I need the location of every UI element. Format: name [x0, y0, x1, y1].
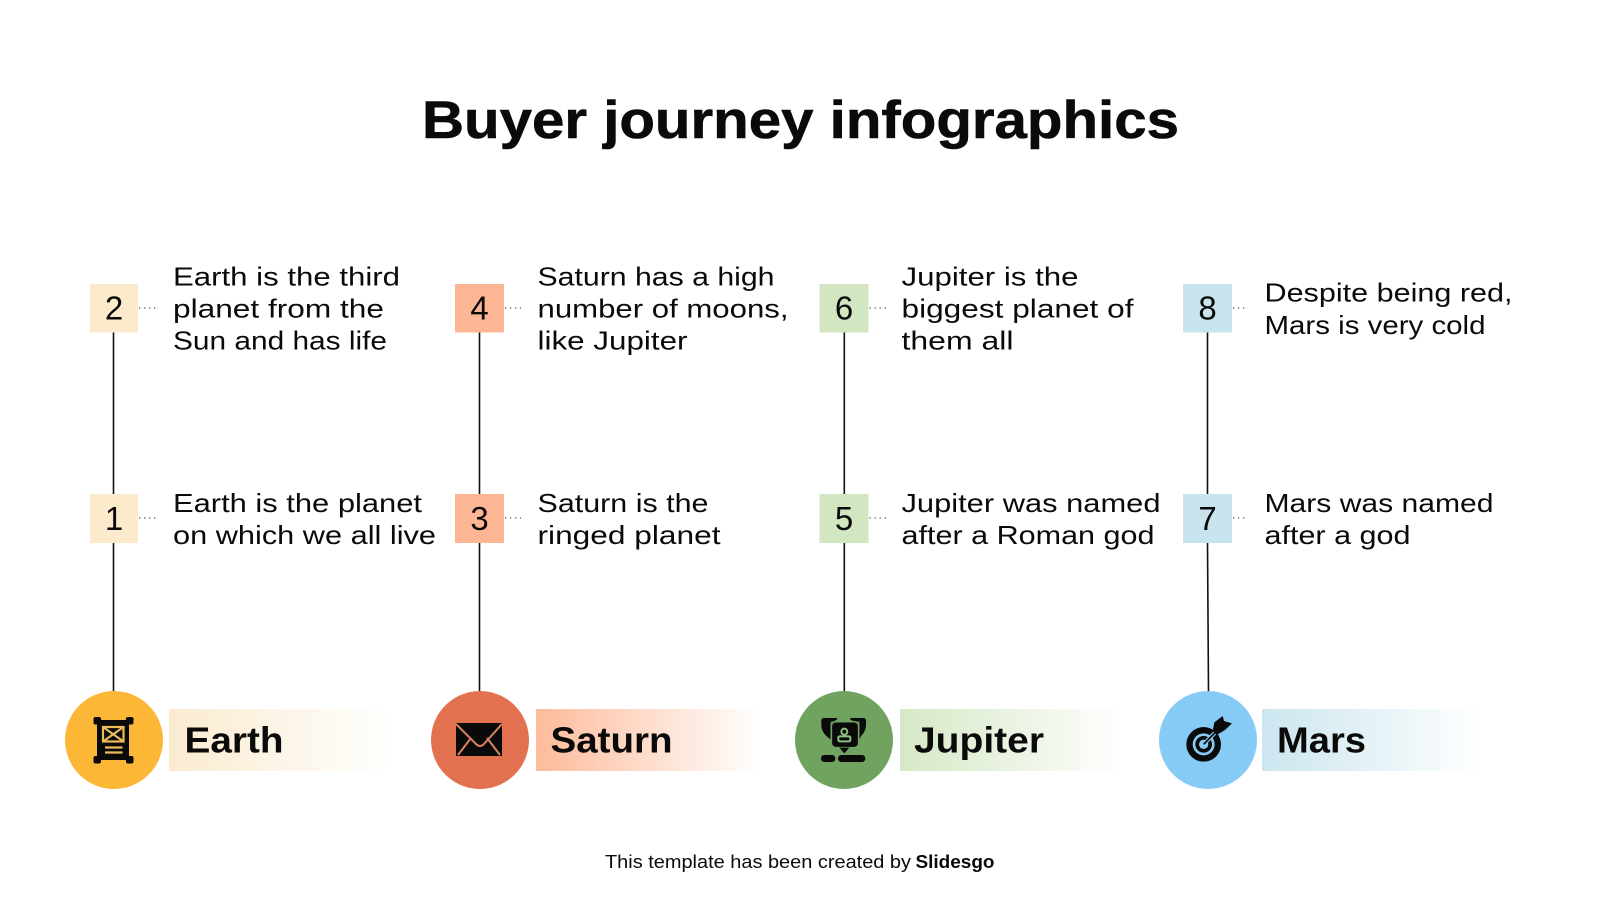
panel: Earth: [65, 264, 436, 789]
step 4: like Jupiter: [538, 328, 688, 356]
label: Jupiter: Jupiter: [914, 720, 1044, 761]
step 4: [455, 264, 788, 356]
icon: target with arrow: [1159, 691, 1257, 789]
label: Saturn: [536, 709, 761, 771]
step 4: 4: [470, 290, 489, 326]
step 3: Saturn is the: [538, 490, 708, 518]
step 6: 6: [835, 290, 853, 326]
step 3: ringed planet: [538, 522, 720, 550]
label: Jupiter: [900, 709, 1124, 771]
step 8: 8: [1198, 290, 1217, 326]
step 7: Mars was named: [1264, 490, 1494, 518]
label: Saturn: Saturn: [550, 720, 672, 761]
step 8: [1183, 280, 1512, 340]
step 2: planet from the: [173, 296, 384, 324]
step 1: [90, 490, 436, 550]
step 2: 2: [105, 290, 123, 326]
step 6: biggest planet of: [902, 296, 1135, 324]
step 8: Despite being red,: [1264, 280, 1512, 308]
step 1: Earth is the planet: [173, 490, 422, 518]
step 5: [820, 490, 1160, 550]
footer credit: Slidesgo: [916, 852, 995, 872]
step 6: Jupiter is the: [902, 264, 1078, 292]
step 6: [820, 264, 1135, 356]
step 5: Jupiter was named: [902, 490, 1160, 518]
footer credit: This template has been created by: [605, 852, 911, 872]
icon: envelope: [431, 691, 529, 789]
step 7: [1183, 490, 1494, 550]
label: Mars: Mars: [1277, 720, 1366, 761]
title: Buyer journey infographics: [422, 91, 1179, 150]
step 7: 7: [1198, 500, 1217, 537]
icon: scroll frame: [65, 691, 163, 789]
step 4: Saturn has a high: [538, 264, 774, 292]
icon: chat bubbles with person: [795, 691, 893, 789]
step 6: them all: [902, 328, 1014, 356]
step 7: after a god: [1264, 522, 1410, 550]
step 2: [90, 264, 400, 356]
step 3: [455, 490, 720, 550]
step 1: 1: [105, 500, 123, 537]
panel: Jupiter: [795, 264, 1160, 789]
step 4: number of moons,: [538, 296, 788, 324]
label: Earth: Earth: [184, 720, 284, 761]
step 5: 5: [835, 500, 853, 537]
step 2: Earth is the third: [173, 264, 400, 292]
step 2: Sun and has life: [173, 328, 387, 356]
panel: Mars: [1159, 280, 1512, 789]
step 1: on which we all live: [173, 522, 436, 550]
label: Mars: [1262, 709, 1484, 771]
step 3: 3: [470, 500, 489, 537]
step 8: Mars is very cold: [1264, 312, 1486, 340]
step 5: after a Roman god: [902, 522, 1154, 550]
panel: Saturn: [431, 264, 788, 789]
label: Earth: [169, 709, 391, 771]
